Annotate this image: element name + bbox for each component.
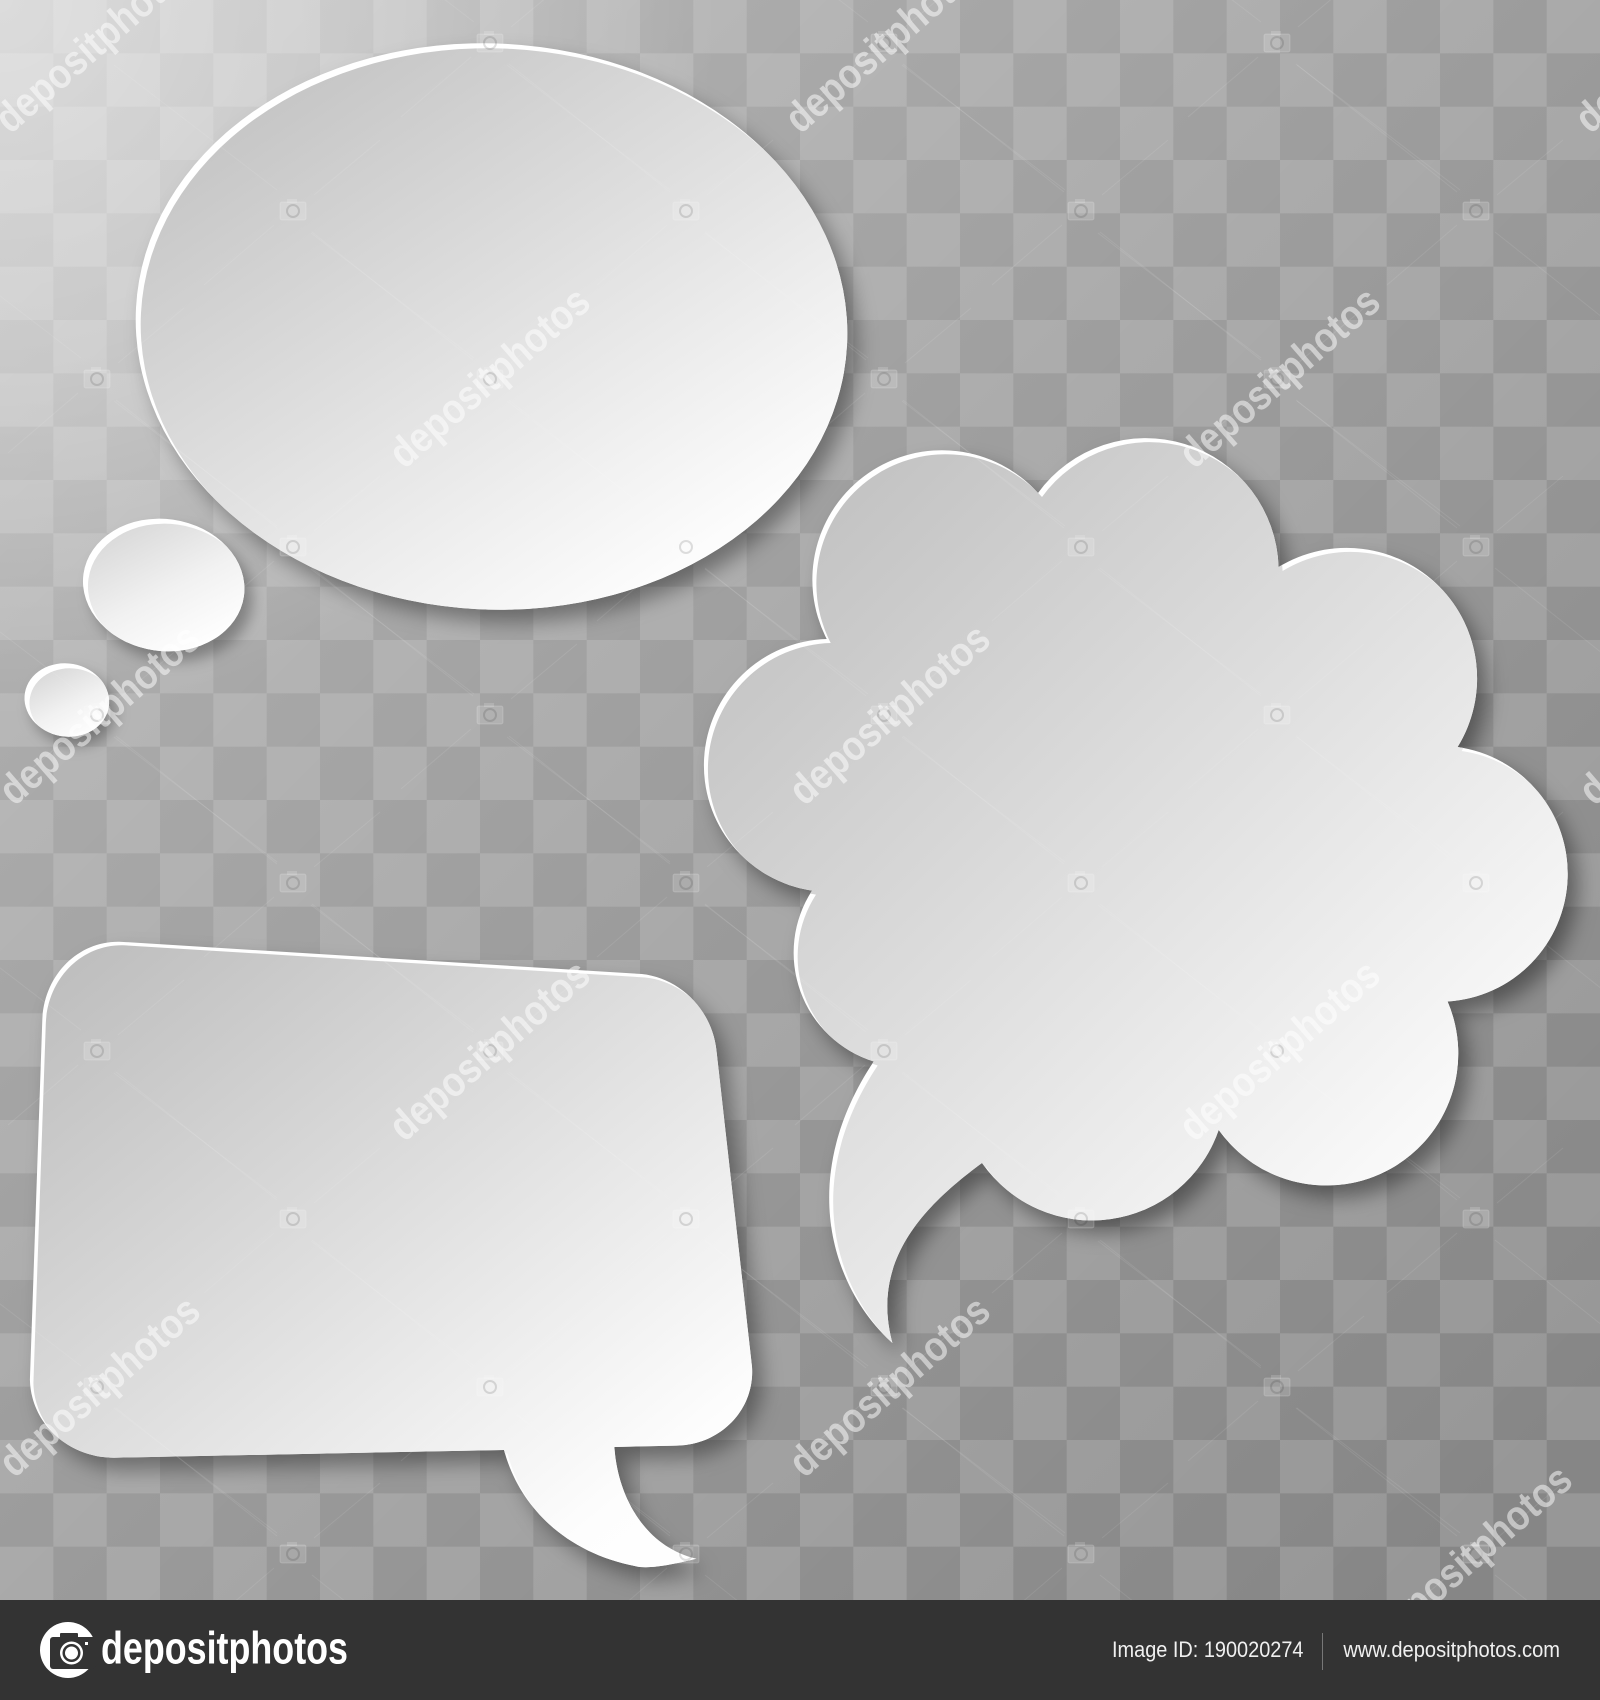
bubble: cloud speech bubble with curved tail	[704, 438, 1578, 1355]
watermark: repeated diagonal depositphotos text: depositphotos	[1169, 950, 1389, 1150]
logo wordmark: depositphotos	[101, 1622, 348, 1674]
image id: Image ID: 190020274	[1112, 1637, 1304, 1662]
watermark: repeated diagonal depositphotos text: depositphotos	[779, 1286, 999, 1486]
footer bar	[0, 1600, 1600, 1700]
bubble: medium thought dot	[83, 518, 259, 668]
watermark: repeated diagonal depositphotos text: depositphotos	[779, 614, 999, 814]
watermark: repeated diagonal depositphotos text: depositphotos	[379, 950, 599, 1150]
watermark: repeated diagonal depositphotos text: depositphotos	[1169, 277, 1389, 477]
bubble: small thought dot	[24, 663, 122, 752]
website url: www.depositphotos.com	[1342, 1637, 1560, 1662]
bubble: large oval thought bubble	[121, 25, 872, 640]
icon: depositphotos camera logo	[40, 1622, 96, 1678]
bubble: rounded rectangle speech bubble with tail	[30, 942, 762, 1579]
watermark: repeated diagonal depositphotos text: depositphotos	[379, 277, 599, 477]
